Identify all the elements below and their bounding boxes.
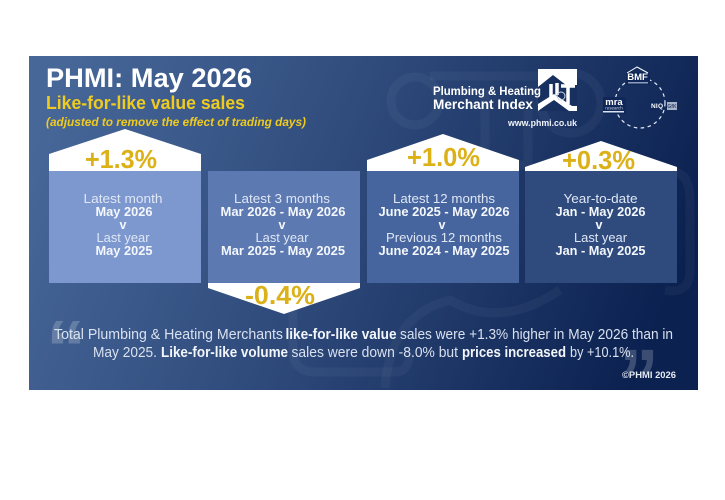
text: latest 12 months bbox=[378, 191, 510, 258]
text: latest 3 months: v bbox=[279, 218, 286, 232]
panel: latest 3 months bbox=[208, 171, 360, 314]
partner logos ring: GfK bbox=[667, 104, 677, 110]
box: latest 12 months bbox=[367, 171, 519, 283]
summary text: May 2025. bbox=[93, 345, 157, 361]
text: latest 3 months: Latest 3 months bbox=[234, 191, 331, 206]
value: +1.0%: +1.0% bbox=[407, 142, 480, 172]
text: year-to-date: v bbox=[596, 218, 603, 232]
copyright: ©PHMI 2026 bbox=[622, 370, 676, 380]
logo: Plumbing & Heating Merchant Index: www.phmi.co.uk bbox=[507, 118, 578, 129]
summary text: sales were +1.3% higher in May 2026 than in bbox=[400, 327, 673, 343]
logo: Plumbing & Heating Merchant Index bbox=[433, 69, 578, 129]
text: latest month bbox=[84, 191, 162, 258]
partner logos ring: research bbox=[605, 106, 623, 110]
roof: +0.3% bbox=[525, 141, 677, 171]
text: latest 12 months: Previous 12 months bbox=[386, 230, 502, 245]
text: latest month: May 2026 bbox=[96, 205, 153, 219]
text: latest month: v bbox=[120, 218, 127, 232]
text: latest 3 months: Mar 2025 - May 2025 bbox=[221, 244, 345, 258]
arrow: -0.4% bbox=[208, 283, 360, 314]
text: latest 12 months: June 2024 - May 2025 bbox=[378, 244, 510, 258]
summary text: Like-for-like volume bbox=[161, 345, 288, 361]
partner logos ring: NIQ bbox=[651, 103, 663, 110]
summary text: like-for-like value bbox=[286, 327, 396, 343]
text: latest month: Last year bbox=[96, 230, 150, 245]
logo: Plumbing & Heating Merchant Index: Merchant Index bbox=[433, 96, 533, 112]
panel: latest month bbox=[49, 129, 201, 283]
text: latest 3 months: Mar 2026 - May 2026 bbox=[220, 205, 346, 219]
panel: latest 12 months bbox=[367, 134, 519, 283]
text: year-to-date: Jan - May 2026 bbox=[556, 205, 646, 219]
subtitle: Like-for-like value sales bbox=[46, 92, 245, 113]
summary text: Total Plumbing & Heating Merchants bbox=[54, 327, 283, 343]
text: year-to-date: Year-to-date bbox=[564, 191, 638, 206]
logo: Plumbing & Heating Merchant Index: Plumbing & Heating bbox=[433, 84, 541, 98]
value: +1.3%: +1.3% bbox=[85, 144, 157, 174]
partner logos ring: mra bbox=[605, 97, 623, 108]
text: latest 3 months: Last year bbox=[256, 230, 309, 245]
partner logos ring bbox=[603, 67, 677, 128]
text: latest 12 months: Latest 12 months bbox=[393, 191, 496, 206]
roof: +1.3% bbox=[49, 129, 201, 171]
box: latest month bbox=[49, 171, 201, 283]
icon: opening quote mark: “ bbox=[46, 304, 86, 393]
summary text: by +10.1%. bbox=[570, 345, 634, 361]
text: year-to-date bbox=[556, 191, 646, 258]
title: PHMI: May 2026 bbox=[46, 63, 252, 93]
summary text bbox=[54, 327, 673, 361]
value: -0.4%: -0.4% bbox=[245, 280, 315, 310]
text: latest month: Latest month bbox=[84, 191, 162, 206]
text: year-to-date: Last year bbox=[574, 230, 628, 245]
text: latest 3 months bbox=[220, 191, 346, 258]
text: latest 12 months: v bbox=[439, 218, 446, 232]
value: +0.3%: +0.3% bbox=[562, 145, 635, 175]
text: latest 12 months: June 2025 - May 2026 bbox=[378, 205, 510, 219]
panel: background bbox=[29, 56, 698, 390]
text: year-to-date: Jan - May 2025 bbox=[556, 244, 646, 258]
box: latest 3 months bbox=[208, 171, 360, 283]
panel: year-to-date bbox=[525, 141, 677, 283]
box: year-to-date bbox=[525, 171, 677, 283]
summary text: sales were down -8.0% but bbox=[292, 345, 458, 361]
partner logos ring: BMF bbox=[627, 72, 648, 83]
text: latest month: May 2025 bbox=[96, 244, 153, 258]
note: (adjusted to remove the effect of trading days) bbox=[46, 117, 306, 129]
roof: +1.0% bbox=[367, 134, 519, 171]
summary text: prices increased bbox=[462, 345, 566, 361]
icon: closing quote mark: ” bbox=[619, 333, 659, 422]
